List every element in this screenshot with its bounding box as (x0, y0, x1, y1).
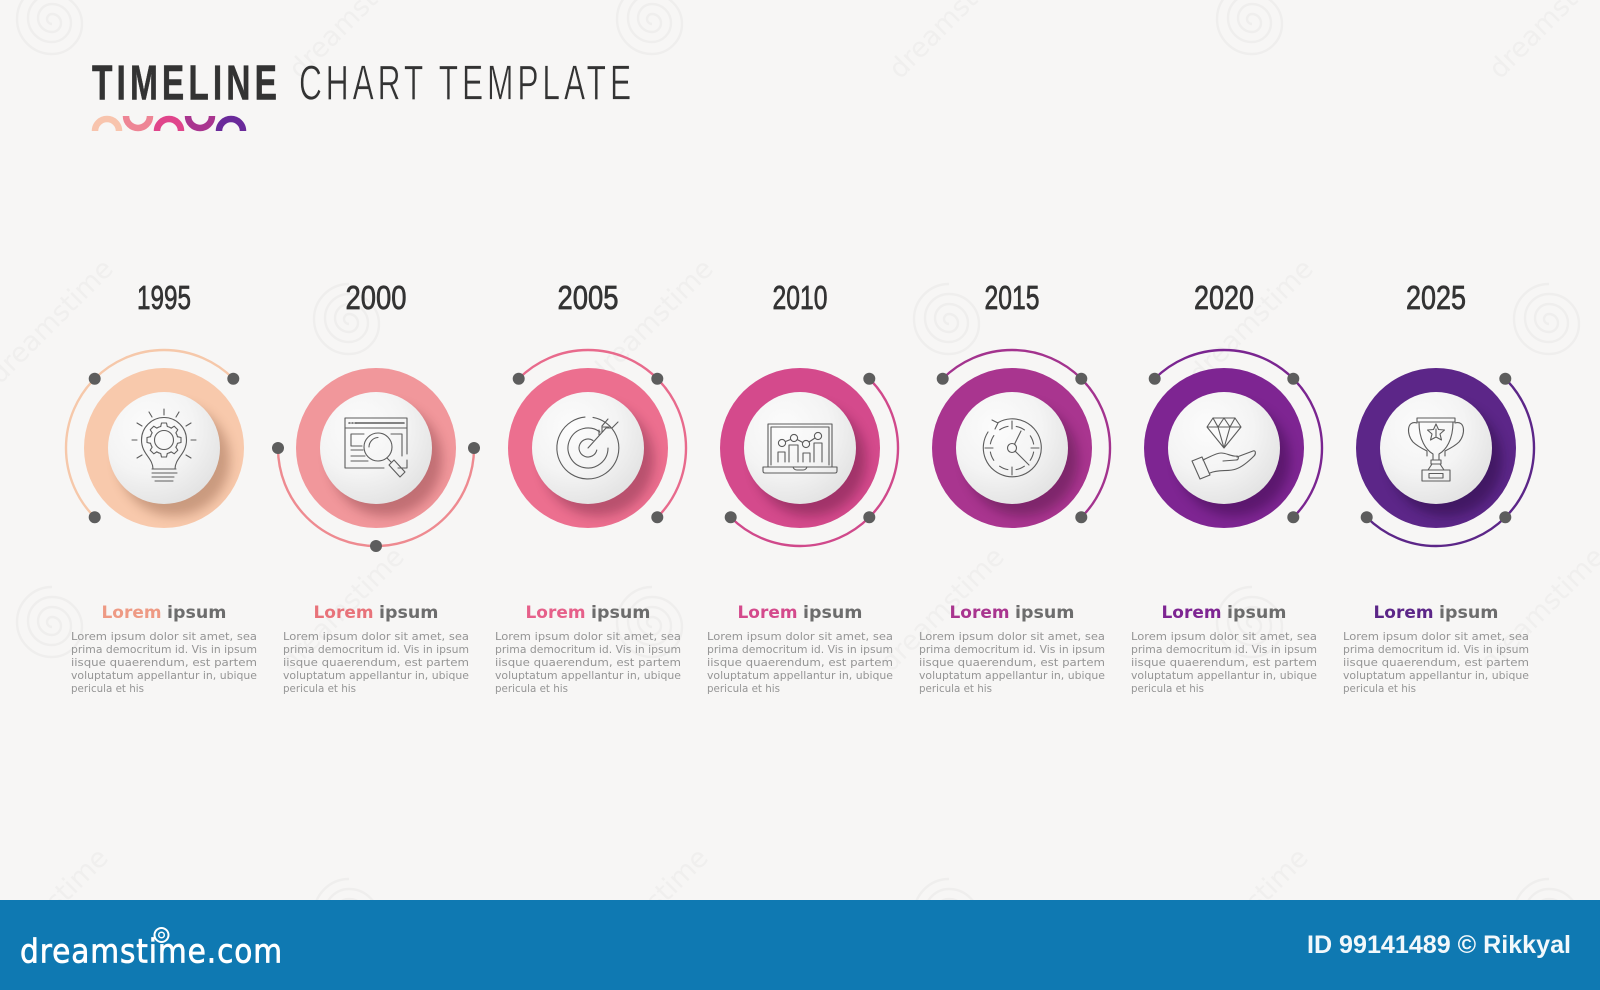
icon: laptop with chart (763, 424, 837, 473)
icon: browser window with magnifier (345, 418, 407, 477)
description 2005: ipsum (591, 603, 650, 623)
dreamstime logo: dreamstime.com (20, 932, 283, 970)
step 2010 (707, 279, 898, 695)
description 2025: voluptatum appellantur in, ubique (1343, 671, 1529, 682)
description 2020: ipsum (1227, 603, 1286, 623)
description 1995: prima democritum id. Vis in ipsum (71, 645, 257, 656)
description 2010: Lorem (738, 603, 798, 623)
step 2005 (495, 279, 686, 695)
description 2015: ipsum (1015, 603, 1074, 623)
description 1995: Lorem (102, 603, 162, 623)
description 2000: voluptatum appellantur in, ubique (283, 671, 469, 682)
icon: diamond over open hand (1192, 418, 1255, 479)
year 2020: 2020 (1194, 279, 1254, 316)
description 2025: Lorem ipsum dolor sit amet, sea (1343, 632, 1529, 643)
description 2010 (707, 603, 893, 695)
description 2015: voluptatum appellantur in, ubique (919, 671, 1105, 682)
description 2010: Lorem ipsum dolor sit amet, sea (707, 632, 893, 643)
description 2000: Lorem ipsum dolor sit amet, sea (283, 632, 469, 643)
step 2015 (919, 279, 1110, 695)
description 2005: Lorem ipsum dolor sit amet, sea (495, 632, 681, 643)
step 2020 (1131, 279, 1322, 695)
description 2000: ipsum (379, 603, 438, 623)
icon: trophy (1408, 418, 1464, 481)
circle badge 2015 (932, 350, 1110, 528)
description 2020: pericula et his (1131, 684, 1204, 695)
description 2005: iisque quaerendum, est partem (495, 658, 681, 669)
description 2020: iisque quaerendum, est partem (1131, 658, 1317, 669)
year 2005: 2005 (558, 279, 618, 316)
description 2020: Lorem ipsum dolor sit amet, sea (1131, 632, 1317, 643)
year 2000: 2000 (346, 279, 406, 316)
description 1995 (71, 603, 257, 695)
description 2015: iisque quaerendum, est partem (919, 658, 1105, 669)
year 2015: 2015 (984, 279, 1040, 316)
icon: clock with circular arrow (983, 419, 1041, 477)
description 2025 (1343, 603, 1529, 695)
description 2025: Lorem (1374, 603, 1434, 623)
title (92, 56, 635, 110)
icon: target with arrow (557, 417, 619, 479)
year 2010: 2010 (772, 279, 828, 316)
circle badge 2005 (508, 350, 686, 528)
description 2000: iisque quaerendum, est partem (283, 658, 469, 669)
description 1995: iisque quaerendum, est partem (71, 658, 257, 669)
description 2020: prima democritum id. Vis in ipsum (1131, 645, 1317, 656)
description 2010: iisque quaerendum, est partem (707, 658, 893, 669)
description 2020: Lorem (1162, 603, 1222, 623)
step 2000 (272, 279, 480, 695)
description 2010: voluptatum appellantur in, ubique (707, 671, 893, 682)
text: dreamstime (1183, 253, 1320, 390)
description 2025: ipsum (1439, 603, 1498, 623)
description 2000 (283, 603, 469, 695)
description 2005: voluptatum appellantur in, ubique (495, 671, 681, 682)
step 1995 (66, 279, 257, 695)
step 2025 (1343, 279, 1534, 695)
description 2025: pericula et his (1343, 684, 1416, 695)
circle badge 2020 (1144, 350, 1322, 528)
description 2015 (919, 603, 1105, 695)
description 2005: Lorem (526, 603, 586, 623)
description 2020 (1131, 603, 1317, 695)
text: dreamstime (874, 541, 1011, 678)
description 2010: prima democritum id. Vis in ipsum (707, 645, 893, 656)
text: dreamstime (578, 842, 715, 979)
description 2025: iisque quaerendum, est partem (1343, 658, 1529, 669)
title: TIMELINE (92, 56, 281, 110)
title wave decoration (95, 116, 243, 131)
description 1995: ipsum (167, 603, 226, 623)
description 2010: pericula et his (707, 684, 780, 695)
year 1995: 1995 (137, 279, 191, 316)
description 2010: ipsum (803, 603, 862, 623)
circle badge 1995 (66, 350, 244, 528)
description 2015: Lorem (950, 603, 1010, 623)
circle badge 2025 (1356, 368, 1534, 546)
description 1995: Lorem ipsum dolor sit amet, sea (71, 632, 257, 643)
text: dreamstime (1178, 842, 1315, 979)
text: dreamstime (583, 253, 720, 390)
circle badge 2010 (720, 368, 898, 546)
description 2015: Lorem ipsum dolor sit amet, sea (919, 632, 1105, 643)
image id and credit: ID 99141489 © Rikkyal (1307, 931, 1571, 959)
description 1995: pericula et his (71, 684, 144, 695)
description 2000: pericula et his (283, 684, 356, 695)
circle badge 2000 (272, 368, 480, 552)
description 1995: voluptatum appellantur in, ubique (71, 671, 257, 682)
description 2000: prima democritum id. Vis in ipsum (283, 645, 469, 656)
description 2005 (495, 603, 681, 695)
title: CHART TEMPLATE (299, 56, 635, 110)
year 2025: 2025 (1406, 279, 1466, 316)
description 2025: prima democritum id. Vis in ipsum (1343, 645, 1529, 656)
footer bar (0, 900, 1600, 990)
description 2005: prima democritum id. Vis in ipsum (495, 645, 681, 656)
description 2000: Lorem (314, 603, 374, 623)
description 2015: prima democritum id. Vis in ipsum (919, 645, 1105, 656)
description 2005: pericula et his (495, 684, 568, 695)
description 2015: pericula et his (919, 684, 992, 695)
text: dreamstime (274, 541, 411, 678)
description 2020: voluptatum appellantur in, ubique (1131, 671, 1317, 682)
icon: light bulb with gear (132, 409, 196, 481)
